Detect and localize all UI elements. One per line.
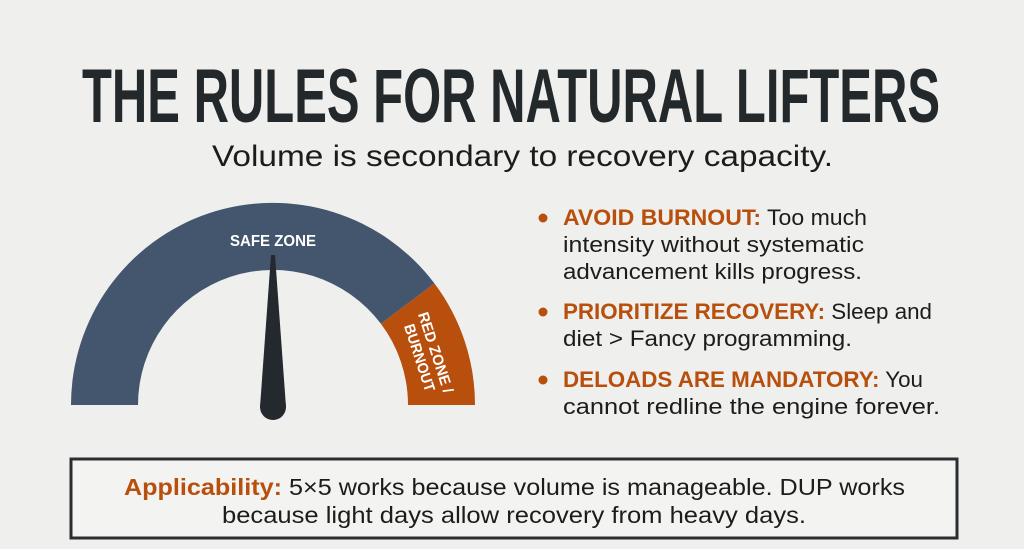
bullet 1 (538, 205, 867, 284)
applicability callout box (71, 459, 957, 538)
bullet 2: diet > Fancy programming. (563, 326, 852, 351)
bullet 2 (538, 299, 932, 351)
bullet list (538, 205, 940, 419)
label: safe zone: SAFE ZONE (230, 233, 316, 250)
gauge (71, 203, 475, 420)
bullet 3: cannot redline the engine forever. (563, 394, 940, 419)
applicability callout box: Applicability: 5×5 works because volume is manageable. DUP works (124, 474, 905, 500)
subtitle: Volume is secondary to recovery capacity. (212, 140, 833, 173)
bullet 1: AVOID BURNOUT: Too much (563, 205, 867, 230)
bullet 3 (538, 367, 940, 419)
gauge: safe zone arc (71, 203, 434, 405)
bullet 3: DELOADS ARE MANDATORY: You (563, 367, 923, 392)
gauge: red zone arc (381, 283, 475, 405)
bullet 2: PRIORITIZE RECOVERY: Sleep and (563, 299, 932, 324)
gauge needle (260, 255, 286, 420)
label: red zone: RED ZONE / (414, 310, 456, 396)
label: red zone: BURNOUT (400, 322, 438, 394)
bullet 1: intensity without systematic (563, 232, 864, 257)
applicability callout box: because light days allow recovery from heavy days. (222, 502, 806, 528)
bullet 1: advancement kills progress. (563, 259, 862, 284)
label: red zone (398, 310, 456, 401)
